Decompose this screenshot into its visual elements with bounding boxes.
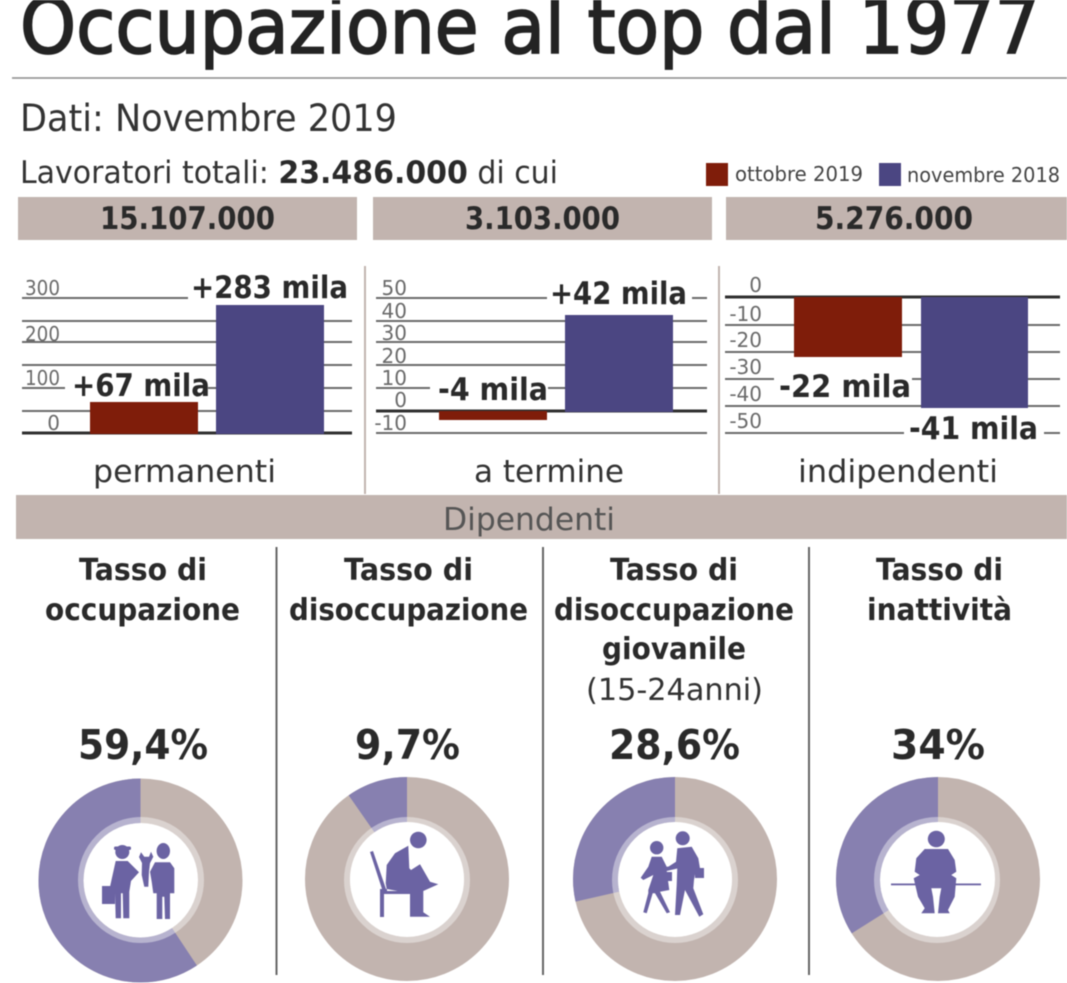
chart: a termine: 0 — [394, 388, 407, 412]
icon: two young people walking — [641, 831, 704, 917]
chart: indipendenti: -41 mila — [909, 411, 1038, 447]
chart: a termine: 20 — [382, 344, 407, 368]
panel: tasso di disoccupazione giovanile: disoccupazione — [554, 593, 794, 628]
chart: permanenti: 0 — [47, 411, 60, 435]
band: fixed-term total — [373, 197, 712, 240]
chart: a termine: 10 — [382, 366, 407, 390]
chart: indipendenti: -22 mila — [779, 369, 911, 405]
panel: tasso di disoccupazione: disoccupazione — [289, 593, 528, 628]
chart: a termine — [374, 276, 707, 490]
chart: indipendenti: -30 — [729, 355, 762, 379]
chart: a termine: -4 mila — [438, 372, 548, 408]
chart: indipendenti: -50 — [729, 409, 762, 433]
panel: tasso di inattivita — [858, 553, 1018, 958]
chart: permanenti: 300 — [25, 276, 60, 300]
panel: tasso di occupazione: Tasso di — [79, 553, 207, 588]
panel: tasso di disoccupazione giovanile: (15-24anni) — [586, 673, 763, 708]
chart: a termine: 40 — [382, 299, 407, 323]
panel: tasso di occupazione: 59,4% — [78, 721, 208, 769]
icon: seated inactive man — [891, 831, 981, 913]
panel: tasso di disoccupazione: Tasso di — [344, 553, 473, 588]
panel: tasso di disoccupazione giovanile: Tasso di — [610, 553, 738, 588]
icon: workers — [102, 843, 174, 919]
chart: permanenti — [22, 270, 352, 490]
panel: tasso di inattivita: 34% — [891, 721, 985, 769]
chart: a termine: a termine — [474, 454, 624, 490]
chart: permanenti: +283 mila — [191, 270, 348, 306]
band: self-employed total — [726, 197, 1067, 240]
legend: ottobre 2019 — [735, 162, 863, 186]
chart: indipendenti: indipendenti — [798, 454, 998, 490]
band: permanent total — [18, 197, 357, 240]
panel: tasso di disoccupazione giovanile: giovanile — [602, 632, 746, 667]
chart: permanenti: +67 mila — [72, 368, 210, 404]
legend — [706, 162, 1060, 187]
chart: permanenti: permanenti — [93, 454, 276, 490]
panel: tasso di inattivita: inattività — [867, 593, 1012, 628]
chart: permanenti: 100 — [25, 366, 60, 390]
band: self-employed total: 5.276.000 — [815, 201, 973, 237]
panel: tasso di disoccupazione — [289, 553, 528, 958]
band: fixed-term total: 3.103.000 — [465, 201, 620, 237]
date line: Dati: Novembre 2019 — [20, 97, 397, 140]
chart: indipendenti: -10 — [729, 302, 762, 326]
chart: a termine: 50 — [382, 276, 407, 300]
band: dipendenti: Dipendenti — [443, 502, 615, 538]
chart: a termine: -10 — [374, 411, 407, 435]
legend: novembre 2018 — [907, 163, 1060, 187]
chart: indipendenti: 0 — [749, 273, 762, 297]
chart: a termine: 30 — [382, 321, 407, 345]
panel: tasso di disoccupazione: 9,7% — [355, 721, 460, 769]
panel: tasso di occupazione — [45, 553, 240, 960]
panel: tasso di disoccupazione giovanile — [554, 553, 794, 958]
panel: tasso di occupazione: occupazione — [45, 593, 240, 628]
icon: seated unemployed man — [370, 832, 438, 917]
panel: tasso di inattivita: Tasso di — [876, 553, 1003, 588]
chart: indipendenti — [725, 273, 1060, 490]
chart: indipendenti: -40 — [729, 382, 762, 406]
band: dipendenti — [16, 495, 1067, 539]
chart: indipendenti: -20 — [729, 328, 762, 352]
chart: permanenti: 200 — [25, 322, 60, 346]
panel: tasso di disoccupazione giovanile: 28,6% — [609, 721, 740, 769]
band: permanent total: 15.107.000 — [100, 201, 275, 237]
chart: a termine: +42 mila — [550, 276, 687, 312]
total workers line: Lavoratori totali: 23.486.000 di cui — [20, 155, 558, 191]
